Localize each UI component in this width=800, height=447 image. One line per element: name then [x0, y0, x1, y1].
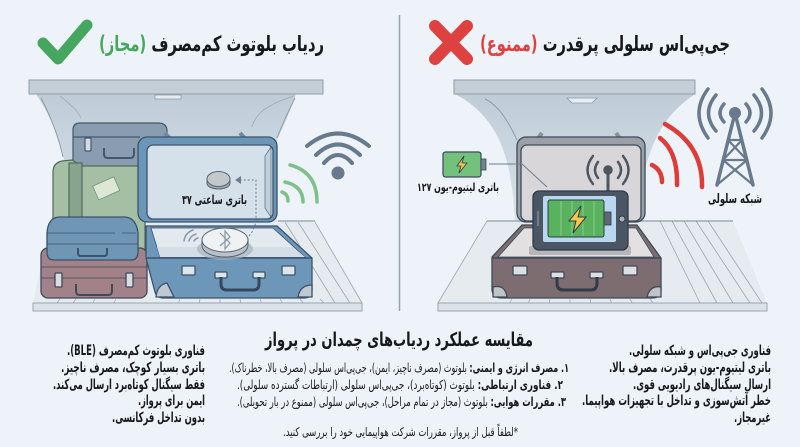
text block: Bluetooth features: فناوری بلوتوث کم‌مصرف (BLE). — [67, 343, 205, 359]
icon: grey wifi — [307, 134, 369, 180]
text block: cellular GPS features: غیرمجاز. — [734, 410, 771, 426]
heading: high-power cellular GPS forbidden — [435, 26, 730, 59]
icon: red cross — [435, 26, 467, 59]
open blue suitcase with Bluetooth tracker — [138, 133, 312, 298]
maroon suitcase — [41, 248, 147, 298]
text block: Bluetooth features: ایمن برای پرواز. — [138, 393, 205, 409]
heading text left: ردیاب بلوتوث کم‌مصرف (مجاز) — [99, 32, 324, 56]
label: lithium-ion battery: باتری لیتیوم-یون ۱۲۷ — [417, 180, 499, 195]
icon: green signal arcs — [282, 165, 317, 202]
label: cellular network: شبکه سلولی — [708, 192, 762, 207]
title: comparison of luggage trackers in flight: مقایسه عملکرد ردیاب‌های چمدان در پرواز — [264, 329, 533, 351]
icon: Bluetooth tracker disc — [197, 228, 253, 260]
grey suitcase at back — [73, 123, 167, 167]
comparison list: ۲. فناوری ارتباطی: بلوتوث (کوتاه‌برد)، جی‌پی‌اس سلولی (ارتباطات گسترده سلولی). — [237, 377, 563, 393]
connector line: battery to phone — [489, 164, 547, 187]
icon: antenna with dark signal waves — [588, 156, 628, 192]
icon: cell tower — [699, 89, 771, 185]
icon: green check mark — [43, 25, 87, 59]
comparison list — [229, 360, 569, 410]
cargo cabin right — [438, 80, 767, 311]
comparison list: ۱. مصرف انرژی و ایمنی: بلوتوث (مصرف ناچیز، ایمن)، جی‌پی‌اس سلولی (مصرف بالا، خطرناک). — [229, 360, 569, 376]
panel: Bluetooth cargo hold scene — [29, 80, 369, 311]
text block: Bluetooth features: بدون تداخل فرکانسی. — [112, 410, 205, 426]
open maroon suitcase — [492, 133, 661, 298]
blue small suitcase — [47, 217, 138, 260]
text block: Bluetooth features — [53, 343, 205, 426]
label: coin cell battery: باتری ساعتی ۳۷ — [182, 192, 247, 207]
text block: Bluetooth features: باتری بسیار کوچک، مصرف ناچیز. — [61, 360, 205, 376]
heading: low-energy Bluetooth tracker allowed — [43, 25, 324, 59]
icon: coin cell battery — [207, 172, 230, 189]
text block: Bluetooth features: فقط سیگنال کوتاه‌برد ارسال می‌کند. — [53, 376, 205, 393]
arrow: dotted tracker to coin cell — [240, 180, 256, 236]
panel: cellular GPS cargo hold scene — [417, 80, 771, 311]
footnote: *لطفاً قبل از پرواز، مقررات شرکت هواپیمایی خود را بررسی کنید. — [283, 423, 518, 440]
icon: arrowhead — [235, 176, 241, 184]
comparison list: ۳. مقررات هوایی: بلوتوث (مجاز در تمام مراحل)، جی‌پی‌اس سلولی (ممنوع در بار تحویلی). — [237, 394, 566, 410]
text block: cellular GPS features — [582, 343, 771, 426]
icon: red signal arcs — [652, 124, 702, 187]
icon: external lithium battery — [443, 152, 486, 177]
cargo cabin left — [29, 80, 362, 311]
icon: phone GPS tracker — [529, 191, 631, 255]
green suitcase — [53, 160, 145, 250]
icon: small signal waves of tracker — [184, 230, 198, 241]
